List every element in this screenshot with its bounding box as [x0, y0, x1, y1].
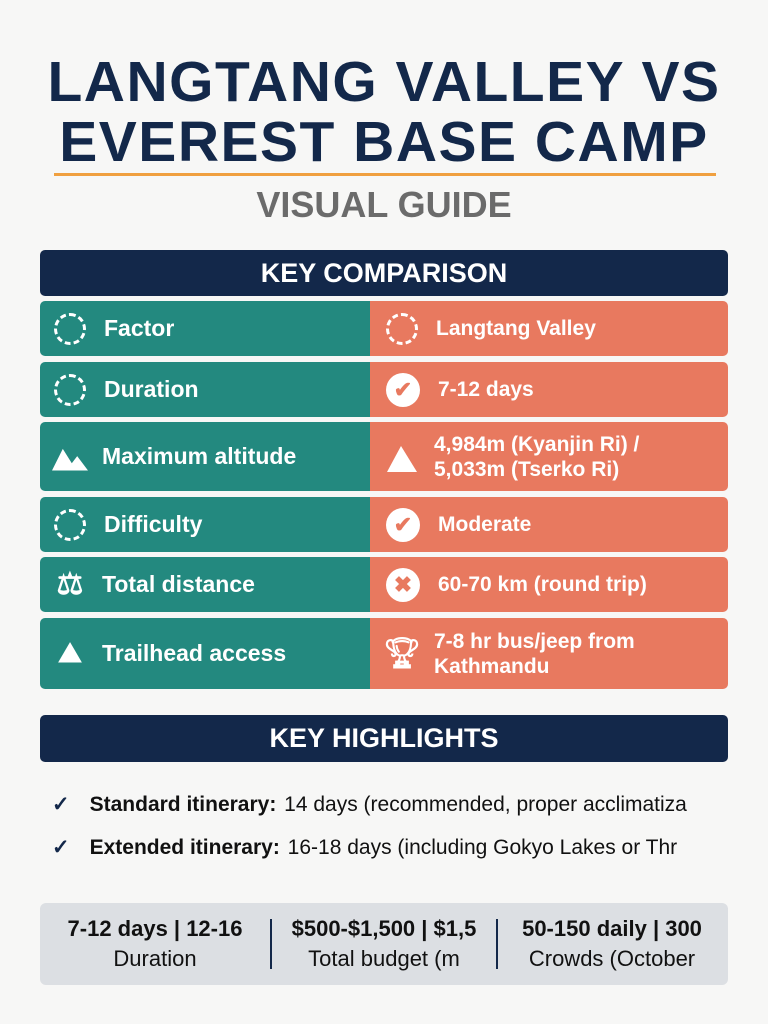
row: max altitude [40, 422, 728, 491]
row: difficulty: Moderate [438, 513, 531, 536]
row: total distance [40, 557, 728, 612]
row: max altitude: 5,033m (Tserko Ri) [434, 458, 619, 480]
row: trailhead access: 🏆︎ [383, 637, 421, 670]
stat: budget: $500-$1,500 | $1,5 [292, 916, 476, 941]
orange divider [54, 173, 716, 176]
row: duration [40, 362, 728, 417]
row: trailhead access: 7-8 hr bus/jeep from [434, 630, 635, 652]
row: factor: Langtang Valley [436, 317, 596, 340]
banner: key comparison: KEY COMPARISON [261, 258, 507, 288]
row: max altitude: Maximum altitude [102, 443, 296, 469]
stat: crowds: Crowds (October [529, 946, 695, 971]
bullet 1: ✓ Standard itinerary: 14 days (recommended, proper acclimatiza [52, 793, 687, 816]
row: trailhead access: Trailhead access [102, 640, 286, 666]
stat: budget [292, 916, 476, 971]
stat: crowds [522, 916, 702, 971]
row: total distance: ⚖ [57, 568, 83, 601]
row: trailhead access: ⛰ [58, 637, 82, 668]
stat: duration [68, 916, 242, 971]
title: LANGTANG VALLEY VS [47, 50, 721, 114]
banner: key comparison [40, 250, 728, 296]
row: difficulty [40, 497, 728, 552]
row: difficulty: Difficulty [104, 511, 202, 537]
row: factor [40, 301, 728, 356]
row: total distance: ✖ [394, 572, 412, 597]
comparison table [40, 301, 728, 689]
row: trailhead access [40, 618, 728, 689]
stat: budget: Total budget (m [308, 946, 460, 971]
stats box [40, 903, 728, 985]
subtitle: VISUAL GUIDE [256, 184, 512, 225]
bullet 2: ✓ Extended itinerary: 16-18 days (including Gokyo Lakes or Thr [52, 836, 677, 859]
row: total distance: Total distance [102, 571, 255, 597]
row: factor: Factor [104, 315, 174, 341]
row: difficulty: ✔ [394, 512, 412, 537]
row: trailhead access: Kathmandu [434, 654, 550, 678]
stat: duration: Duration [113, 946, 197, 971]
title [47, 50, 721, 174]
banner: key highlights: KEY HIGHLIGHTS [269, 723, 499, 753]
row: total distance: 60-70 km (round trip) [438, 573, 647, 596]
row: duration: Duration [104, 376, 199, 402]
stat: duration: 7-12 days | 12-16 [68, 916, 242, 941]
banner: key highlights [40, 715, 728, 762]
title: EVEREST BASE CAMP [59, 110, 709, 174]
row: duration: ✔ [394, 377, 412, 402]
row: max altitude: 4,984m (Kyanjin Ri) / [434, 432, 639, 456]
stat: crowds: 50-150 daily | 300 [522, 916, 702, 941]
row: duration: 7-12 days [438, 378, 534, 401]
